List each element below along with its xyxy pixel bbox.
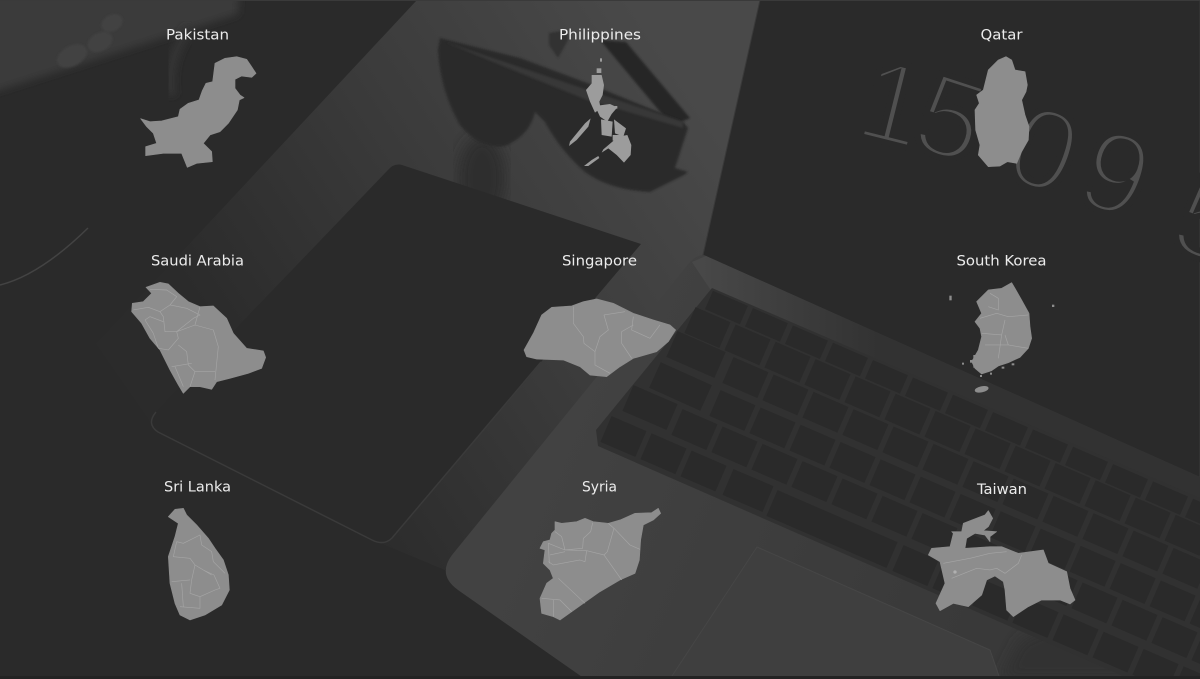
panel: South Korea <box>949 254 1054 393</box>
clock digits in the photo <box>846 32 1200 292</box>
panel: Taiwan <box>928 482 1075 617</box>
right side of deck shading <box>1000 560 1200 679</box>
map: Qatar <box>975 57 1029 167</box>
keyboard keys <box>606 300 1200 679</box>
clock digits in the photo: 9 <box>1063 101 1169 246</box>
laptop screen <box>703 0 1200 488</box>
map: Pakistan <box>141 57 256 167</box>
bottom edge strip <box>0 676 1200 679</box>
camera body <box>0 0 240 95</box>
label: Syria: Syria <box>582 480 617 496</box>
label: Philippines: Philippines <box>559 28 641 44</box>
keyboard well <box>596 288 1200 679</box>
label: Sri Lanka: Sri Lanka <box>164 480 231 496</box>
tablet <box>151 165 641 543</box>
camera strap curve <box>0 228 88 285</box>
clock digits in the photo: 5 <box>900 46 1002 190</box>
clock digits in the photo: 0 <box>991 77 1097 222</box>
sunglasses shadow <box>458 136 506 220</box>
map: Saudi Arabia <box>132 282 266 393</box>
panel: Pakistan <box>141 28 256 167</box>
map: Syria <box>540 508 661 620</box>
desk surface <box>96 0 760 570</box>
map: South Korea <box>949 283 1054 393</box>
panel: Philippines <box>559 28 641 166</box>
sunglasses <box>438 30 690 192</box>
label: Singapore: Singapore <box>562 254 637 270</box>
trackpad <box>670 547 1000 679</box>
tablet edge <box>151 362 541 543</box>
label: Saudi Arabia: Saudi Arabia <box>151 254 244 270</box>
map: Sri Lanka <box>168 508 229 620</box>
camera lens shadow <box>170 28 190 95</box>
panel: Qatar <box>975 28 1029 167</box>
map: Philippines <box>569 58 631 166</box>
laptop deck <box>446 255 1200 679</box>
label: South Korea: South Korea <box>956 254 1046 270</box>
label: Taiwan: Taiwan <box>976 482 1027 498</box>
map: Taiwan <box>928 511 1075 617</box>
deck upper strip <box>692 256 1200 505</box>
camera dials <box>53 11 125 72</box>
label: Pakistan: Pakistan <box>166 28 229 44</box>
panel: Sri Lanka <box>164 480 231 620</box>
panel: Singapore <box>524 254 676 377</box>
panel: Saudi Arabia <box>132 254 266 393</box>
clock digits in the photo: 1 <box>846 32 940 174</box>
top edge line <box>0 0 1200 1</box>
panel: Syria <box>540 480 661 620</box>
map: Singapore <box>524 299 676 377</box>
label: Qatar: Qatar <box>980 28 1023 44</box>
